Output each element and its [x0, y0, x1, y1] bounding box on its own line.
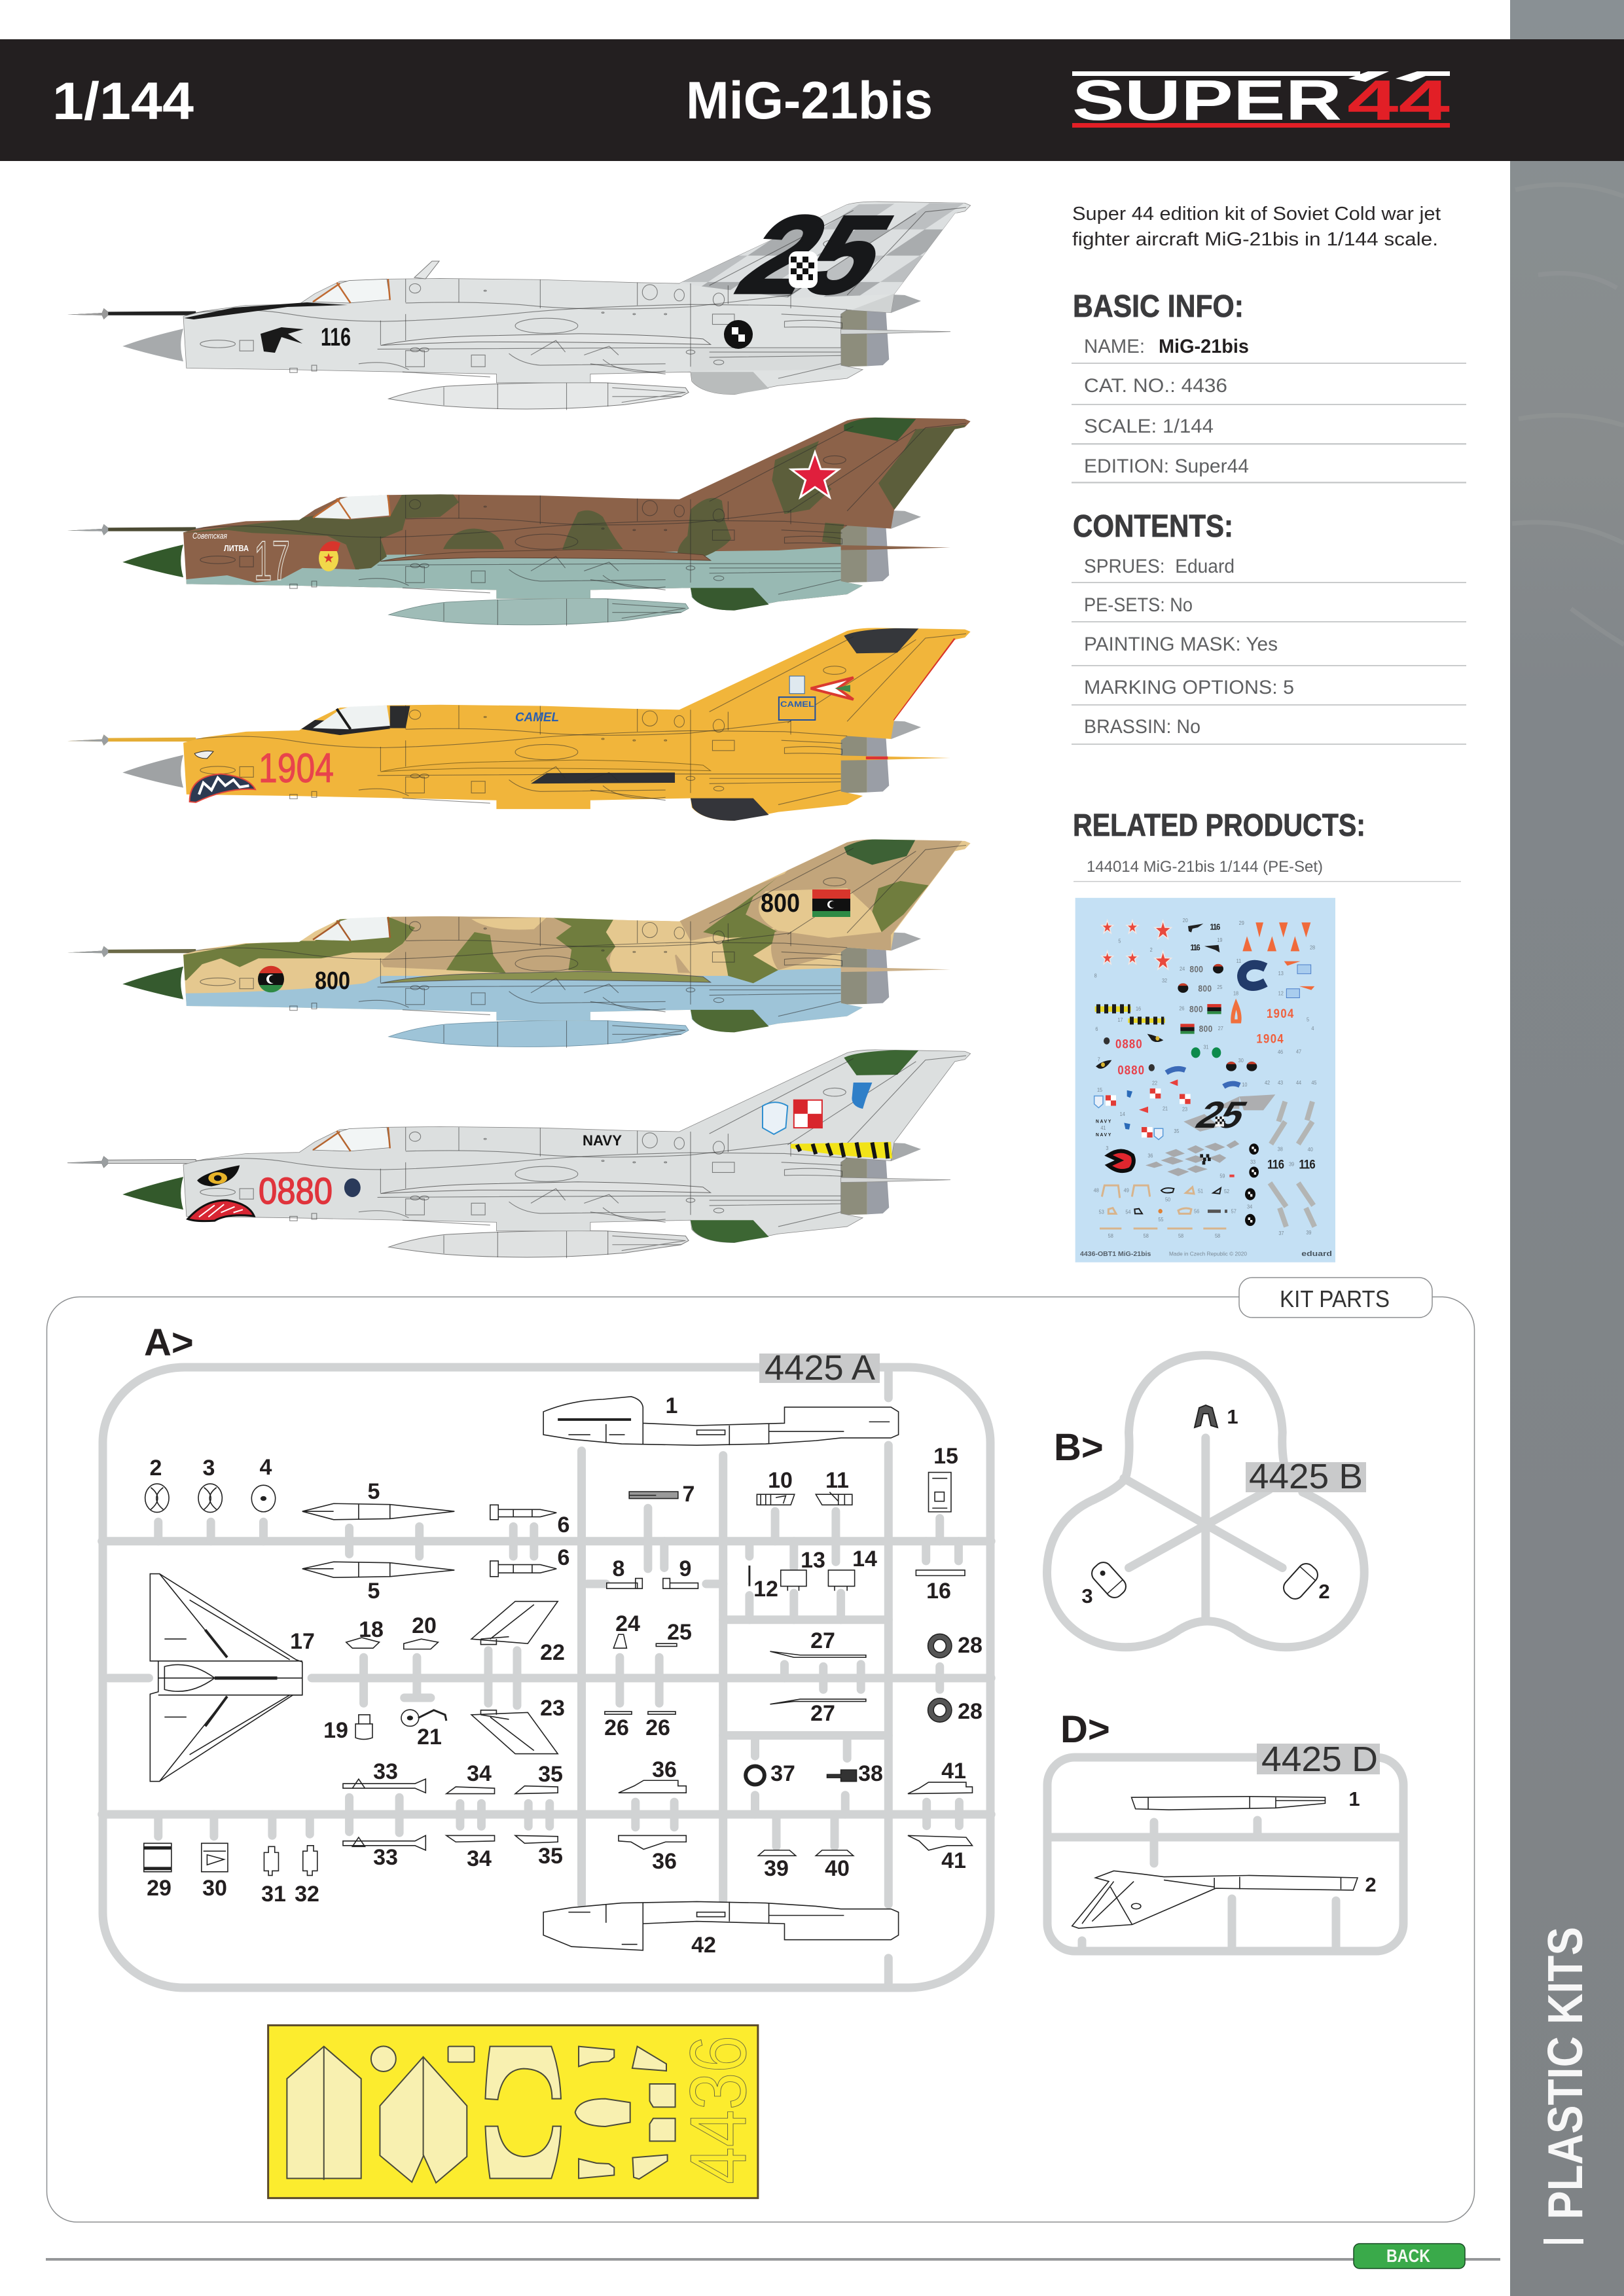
fin number 25: 25	[719, 194, 912, 317]
decal: small numbers: 40	[1308, 1147, 1313, 1153]
decal: small numbers: 2	[1150, 947, 1153, 953]
header band	[0, 39, 1624, 161]
decal: small numbers: 42	[1265, 1079, 1270, 1086]
parts 5: drop tanks	[302, 1503, 454, 1577]
decal: small numbers: 35	[1174, 1128, 1180, 1134]
heading B: B>	[1054, 1426, 1104, 1469]
decal: small numbers: 54	[1125, 1209, 1131, 1215]
tail code 116: 116	[321, 323, 351, 351]
part numbers for sprue A: 21	[417, 1725, 442, 1749]
footer rule	[46, 2258, 1500, 2261]
parts 6: missiles	[490, 1505, 556, 1577]
sprue label: 4425 A	[765, 1348, 875, 1388]
part numbers D	[1348, 1787, 1377, 1896]
decal: badges and triangles: NAVY	[1096, 1119, 1111, 1124]
parts 18 19 20 21	[346, 1638, 446, 1739]
decal: small numbers: 16	[1136, 1006, 1142, 1012]
decal: small numbers: 47	[1296, 1049, 1301, 1055]
decal: small numbers: 38	[1278, 1146, 1283, 1153]
part numbers for sprue A: 38	[858, 1761, 883, 1786]
roundel	[724, 320, 753, 349]
part numbers for sprue A: 36	[652, 1849, 677, 1874]
decal: small numbers: 15	[1097, 1087, 1103, 1093]
related products: 144014 MiG-21bis 1/144 (PE-Set)	[1087, 858, 1323, 876]
part numbers for sprue A: 36	[652, 1757, 677, 1782]
part 15	[929, 1473, 951, 1512]
part numbers for sprue A: 41	[941, 1759, 966, 1784]
decal: green circles	[1191, 1047, 1221, 1058]
decal: small numbers: 29	[1239, 920, 1244, 926]
decal: codes 116: 116	[1190, 942, 1200, 952]
basic info panel: CAT. NO.: 4436	[1084, 375, 1227, 397]
part 2: capsule	[1280, 1560, 1321, 1602]
aircraft 2: Soviet brown-green camouflage	[67, 418, 971, 626]
mask: oval	[371, 2046, 396, 2072]
part numbers for sprue A: 8	[613, 1556, 624, 1581]
part numbers D: 2	[1365, 1873, 1377, 1896]
panel: kit parts frame	[46, 1278, 1475, 2222]
decal: codes 0880 and eyes	[1096, 1034, 1163, 1077]
part numbers for sprue A: 2	[150, 1456, 162, 1480]
fin number 800: 800	[761, 889, 800, 918]
part numbers for sprue A: 6	[558, 1513, 569, 1537]
decal: shark mouth	[1108, 1151, 1134, 1171]
rows: SPRUES: Eduard	[1084, 556, 1235, 577]
logo: Super44	[1072, 69, 1450, 132]
sidebar label: PLASTIC KITS: PLASTIC KITS	[1538, 1927, 1593, 2219]
decal: tiger stripes	[1095, 1007, 1165, 1023]
intro text: fighter aircraft MiG-21bis in 1/144 scale.	[1072, 229, 1438, 250]
decal: small numbers: 5	[1118, 938, 1121, 944]
aircraft 3 markings	[259, 700, 814, 791]
parts drawn on sprue A	[144, 1397, 972, 1950]
decal: small numbers: 28	[1310, 944, 1316, 950]
decal: small numbers: 39	[1306, 1230, 1311, 1236]
mask: oval pane	[575, 2099, 630, 2126]
parts 37 38	[746, 1767, 856, 1785]
decal: small numbers: 13	[1278, 971, 1284, 977]
part numbers for sprue A: 35	[538, 1762, 563, 1787]
part numbers for sprue A: 31	[261, 1882, 286, 1907]
antiglare strip	[184, 302, 348, 319]
decal: small numbers: 30	[1238, 1057, 1244, 1064]
part numbers for sprue A: 4	[260, 1455, 272, 1480]
decal: small numbers: 43	[1278, 1079, 1284, 1086]
part numbers for sprue A: 41	[941, 1848, 966, 1873]
part 1: fuselage half	[543, 1397, 899, 1445]
decal: codes 1904: 1904	[1267, 1007, 1293, 1020]
decal: Libyan numbers: 800	[1189, 964, 1203, 975]
contents panel: BRASSIN: No	[1084, 716, 1200, 738]
part numbers for sprue A: 34	[467, 1761, 492, 1786]
painting mask	[268, 2025, 758, 2198]
red star	[791, 452, 839, 497]
parts 29 30 31 32	[144, 1843, 317, 1875]
basic info panel: EDITION: Super44	[1084, 456, 1249, 477]
decal: small numbers: 52	[1224, 1189, 1229, 1194]
part numbers for sprue A: 33	[373, 1759, 398, 1784]
shark mouth	[190, 774, 255, 802]
decal: small numbers: 18	[1233, 990, 1239, 996]
decal: red stars	[1102, 920, 1171, 969]
decal: small numbers: 10	[1242, 1082, 1248, 1088]
part numbers for sprue A: 15	[933, 1444, 958, 1469]
decal sheet	[1075, 898, 1335, 1263]
part numbers for sprue A: 35	[538, 1844, 563, 1869]
decal: small numbers: 22	[1152, 1080, 1157, 1086]
Camel logo: CAMEL	[515, 711, 559, 725]
part numbers for sprue A: 3	[203, 1456, 215, 1480]
Hungarian chevron	[811, 677, 854, 700]
decal: small numbers: 56	[1194, 1208, 1200, 1215]
Camel box	[779, 697, 815, 720]
squadron badge	[789, 676, 804, 694]
decal: big number 25 with check camouflage: 25	[1189, 1094, 1254, 1136]
decal: small numbers: 5	[1307, 1016, 1310, 1023]
part numbers B: 3	[1081, 1585, 1093, 1607]
decal: small numbers: 20	[1183, 917, 1188, 924]
decal: small numbers: 3	[1106, 1145, 1109, 1151]
decal: sheet footer: eduard	[1301, 1249, 1332, 1258]
part numbers for sprue A: 18	[359, 1617, 384, 1642]
decal: Libyan numbers: 800	[1189, 1004, 1203, 1014]
basic info panel	[1072, 289, 1466, 483]
decal: small numbers: 51	[1198, 1188, 1203, 1194]
decal: small numbers: 37	[1278, 1230, 1284, 1236]
intro text: Super 44 edition kit of Soviet Cold war jet	[1072, 204, 1441, 224]
aircraft 3 markings: CAMEL	[780, 700, 814, 709]
decal: small numbers: 59	[1219, 1173, 1225, 1179]
part numbers for sprue A: 25	[667, 1620, 692, 1645]
part 42: fuselage half	[543, 1901, 899, 1950]
aircraft 1: Croatian light grey MiG-21	[67, 202, 971, 410]
logo: Super44: SUPER	[1072, 69, 1342, 132]
decal: small numbers: 58	[1215, 1233, 1221, 1239]
part numbers for sprue A: 9	[679, 1556, 691, 1581]
decal: codes 116: 116	[1299, 1157, 1316, 1172]
runner frame	[1047, 1757, 1403, 1951]
part numbers for sprue A: 24	[615, 1611, 640, 1636]
part numbers for sprue A: 37	[770, 1761, 795, 1786]
contents panel: PAINTING MASK: Yes	[1084, 634, 1278, 655]
part 1: seat	[1195, 1405, 1218, 1427]
part D1: fuselage spine	[1132, 1797, 1325, 1810]
decal: sheet footer: 4436-OBT1 MiG-21bis	[1080, 1251, 1151, 1257]
mask: windscreen	[287, 2047, 361, 2178]
part numbers for sprue A: 6	[558, 1545, 569, 1570]
part numbers for sprue A: 10	[768, 1468, 793, 1493]
decal: small numbers: 26	[1179, 1005, 1185, 1012]
aircraft 2 markings: ЛИТВА	[224, 543, 249, 553]
back button: BACK	[1386, 2246, 1430, 2266]
mask: rounded panes	[650, 2084, 676, 2107]
logo: Super44: 44	[1347, 69, 1450, 132]
parts 33 34 35	[343, 1779, 558, 1850]
part numbers for sprue A: 28	[958, 1633, 983, 1658]
basic info panel: MiG-21bis	[1159, 336, 1249, 357]
contents panel	[1072, 509, 1466, 745]
decal: small numbers: 21	[1163, 1105, 1168, 1111]
NAVY: NAVY	[583, 1132, 622, 1149]
mask: upper arc	[485, 2047, 561, 2100]
part numbers for sprue A: 23	[540, 1696, 565, 1721]
parts 8 9	[607, 1579, 698, 1588]
sprue frame and runners	[102, 1367, 991, 1988]
rows: NAME:	[1084, 336, 1145, 357]
aircraft 5 markings	[259, 1132, 622, 1212]
parts 22 23: tail planes	[471, 1602, 558, 1754]
part numbers for sprue A: 13	[801, 1548, 825, 1573]
contents panel: MARKING OPTIONS: 5	[1084, 677, 1294, 698]
part numbers for sprue A: 11	[825, 1468, 849, 1493]
decal: small numbers: 12	[1278, 990, 1284, 996]
kit title: MiG-21bis	[686, 71, 933, 130]
part numbers for sprue A	[147, 1393, 983, 1958]
part numbers for sprue A: 42	[691, 1933, 716, 1958]
heading: CONTENTS:	[1073, 509, 1233, 544]
number 1904: 1904	[259, 745, 334, 791]
part 16	[916, 1570, 965, 1575]
part numbers for sprue A: 28	[958, 1699, 983, 1724]
decal: codes 0880 and eyes: 0880	[1117, 1064, 1144, 1077]
blue squadron badge	[763, 1102, 787, 1134]
parts 2 3 4: intake parts	[145, 1484, 276, 1513]
decal: codes 0880 and eyes: 0880	[1115, 1037, 1142, 1051]
decal: shark arc	[1242, 965, 1265, 986]
number 17: 17	[254, 530, 290, 592]
part numbers for sprue A: 29	[147, 1876, 171, 1901]
part numbers for sprue A: 27	[810, 1701, 835, 1726]
decal: small numbers: 55	[1158, 1216, 1164, 1223]
decal: small numbers: 31	[1203, 1044, 1208, 1050]
part numbers for sprue A: 32	[295, 1882, 319, 1907]
part numbers for sprue A: 7	[683, 1482, 695, 1507]
decal: small numbers: 48	[1094, 1187, 1099, 1194]
decal: Libyan numbers: 800	[1198, 983, 1212, 994]
decal: small numbers: 34	[1247, 1204, 1253, 1210]
decal: Libyan roundels and flags	[1178, 964, 1257, 1071]
decal: chevrons	[1242, 922, 1310, 951]
decal: small numbers: 58	[1108, 1233, 1113, 1239]
part 7	[629, 1492, 678, 1499]
decal: roundels	[1245, 1143, 1259, 1226]
mask: lower arc	[485, 2126, 561, 2178]
decal: small numbers: 49	[1124, 1187, 1129, 1194]
aircraft 3: Hungarian yellow Camel	[67, 628, 971, 821]
decal: sheet footer	[1080, 1249, 1332, 1258]
parts 24 25 26	[605, 1634, 677, 1714]
nose slogan: Советская	[192, 531, 227, 541]
decal: badges and triangles	[1094, 1069, 1240, 1139]
part 17: wing	[150, 1574, 302, 1782]
decal: codes 1904: 1904	[1256, 1031, 1284, 1046]
part numbers for sprue A: 1	[666, 1393, 677, 1418]
decal: small numbers: 14	[1120, 1111, 1125, 1117]
parts 12 13 14	[749, 1566, 855, 1591]
part numbers for sprue A: 5	[368, 1579, 380, 1604]
decal: small numbers: 17	[1117, 1017, 1123, 1023]
basic info panel: SCALE: 1/144	[1084, 416, 1214, 437]
parts 10 11	[757, 1492, 852, 1505]
sprue A	[102, 1321, 991, 1988]
fin crest	[789, 251, 818, 288]
decal: grey fin checks	[1270, 1102, 1314, 1227]
part numbers for sprue A: 5	[368, 1479, 380, 1504]
part numbers for sprue A: 26	[645, 1715, 670, 1740]
heading: RELATED PRODUCTS:	[1073, 808, 1365, 843]
decal: small numbers: 53	[1099, 1209, 1104, 1215]
part numbers B	[1081, 1405, 1330, 1607]
decal: small numbers: 11	[1236, 958, 1241, 964]
tiger-stripe tail pipe	[791, 1142, 892, 1158]
back button	[1354, 2244, 1465, 2269]
shark emblem	[852, 1083, 872, 1109]
part numbers for sprue A: 34	[467, 1846, 492, 1871]
sprue label: 4425 B	[1249, 1457, 1363, 1496]
mast	[414, 261, 439, 279]
decal: small numbers: 50	[1165, 1196, 1171, 1202]
decal: small numbers: 58	[1144, 1233, 1149, 1239]
mask number 4436: 4436	[674, 2036, 763, 2184]
decal: Polish checks	[1106, 1088, 1191, 1138]
contents panel: PE-SETS: No	[1084, 594, 1193, 616]
decal: codes 116: 116	[1267, 1157, 1284, 1172]
aircraft 2 markings	[192, 452, 839, 592]
eye	[194, 751, 213, 759]
decal: small numbers: 33	[1250, 1158, 1256, 1165]
decal: small numbers: 39	[1289, 1161, 1294, 1167]
nose badge	[344, 1178, 361, 1197]
aircraft 1 markings	[184, 194, 912, 353]
fuselage number 800: 800	[315, 967, 350, 995]
decal: small numbers: 8	[1094, 973, 1097, 979]
part numbers for sprue A: 30	[202, 1876, 227, 1901]
decal: grey diamonds	[1146, 1140, 1239, 1176]
mask: canopy	[380, 2057, 467, 2183]
heading A: A>	[144, 1321, 194, 1364]
decal: small numbers: 44	[1296, 1079, 1302, 1086]
shark mouth	[188, 1200, 254, 1221]
part numbers for sprue A: 12	[753, 1577, 778, 1602]
parts 39 40	[758, 1850, 854, 1856]
parts 27 28	[770, 1634, 952, 1722]
decal: small numbers: 27	[1218, 1025, 1223, 1031]
aircraft 4: Libyan desert camouflage	[67, 836, 971, 1048]
Libyan roundel	[258, 966, 284, 992]
part numbers D: 1	[1348, 1787, 1360, 1810]
decal: small numbers: 32	[1162, 978, 1167, 984]
decal: Libyan numbers: 800	[1199, 1024, 1212, 1034]
decal: small numbers: 6	[1095, 1026, 1098, 1032]
decal: codes 116	[1188, 922, 1316, 1172]
sprue D	[1047, 1708, 1403, 1951]
aircraft 5: Polish Navy grey with shark mouth	[67, 1050, 971, 1258]
sprue label: 4425 D	[1261, 1740, 1378, 1779]
decal: small numbers: 24	[1180, 965, 1185, 972]
part numbers for sprue A: 14	[852, 1547, 877, 1571]
parts 36 41	[619, 1780, 972, 1850]
part numbers for sprue A: 40	[825, 1856, 850, 1881]
decal: small numbers: 41	[1100, 1124, 1106, 1131]
decal: badges and triangles: NAVY	[1096, 1132, 1111, 1138]
part D2: fin half	[1072, 1871, 1358, 1928]
decal: codes 1904	[1256, 1007, 1293, 1046]
eye	[197, 1165, 240, 1186]
part numbers for sprue A: 39	[764, 1856, 789, 1881]
decal: small numbers: 4	[1311, 1026, 1314, 1031]
tab: kit parts: KIT PARTS	[1280, 1285, 1390, 1312]
part numbers for sprue A: 19	[323, 1718, 348, 1743]
part numbers B: 2	[1318, 1580, 1330, 1603]
decal: small numbers: 7	[1098, 1056, 1100, 1063]
decal: small numbers: 46	[1278, 1049, 1284, 1055]
part numbers for sprue A: 27	[810, 1628, 835, 1653]
part numbers B: 1	[1227, 1405, 1238, 1428]
decal: small numbers: 25	[1217, 984, 1223, 990]
part 3: capsule	[1089, 1559, 1129, 1601]
intro text	[1072, 204, 1441, 250]
decal: sheet footer: Made in Czech Republic © 2020	[1169, 1251, 1248, 1257]
sidebar	[1510, 0, 1624, 2296]
number 0880: 0880	[259, 1170, 333, 1212]
Polish checker	[794, 1100, 822, 1128]
sprue B	[1047, 1355, 1366, 1647]
decal: small numbers: 58	[1178, 1233, 1184, 1239]
decal: small numbers: 36	[1147, 1153, 1153, 1159]
guards badge	[319, 541, 340, 571]
decal: codes 116: 116	[1210, 922, 1221, 932]
decal: small numbers: 57	[1231, 1208, 1236, 1215]
decal: small numbers: 19	[1217, 937, 1222, 943]
part numbers for sprue A: 22	[540, 1640, 565, 1665]
related products	[1073, 808, 1461, 882]
decal: small numbers: 45	[1311, 1079, 1317, 1086]
part numbers for sprue A: 26	[604, 1715, 629, 1740]
bird emblem	[261, 327, 304, 353]
heading D: D>	[1060, 1708, 1110, 1751]
part numbers for sprue A: 33	[373, 1845, 398, 1870]
heading: BASIC INFO:	[1073, 289, 1244, 324]
Libyan flag	[812, 889, 850, 917]
aircraft 4 markings	[258, 889, 850, 995]
part numbers for sprue A: 17	[290, 1629, 315, 1654]
decal: small numbers	[1094, 917, 1317, 1239]
decal: instrument outlines	[1100, 1176, 1235, 1229]
mask: square	[448, 2047, 475, 2062]
decal: big number 25 with check camouflage	[1183, 1094, 1275, 1136]
decal: Libyan numbers	[1189, 964, 1212, 1034]
tab: kit parts	[1239, 1278, 1432, 1318]
part numbers for sprue A: 20	[412, 1613, 437, 1638]
decal: small numbers: 23	[1182, 1106, 1188, 1113]
mask: side panes	[579, 2047, 614, 2066]
part numbers for sprue A: 16	[926, 1579, 951, 1604]
scale title: 1/144	[52, 72, 194, 131]
trefoil runner	[1047, 1355, 1364, 1647]
